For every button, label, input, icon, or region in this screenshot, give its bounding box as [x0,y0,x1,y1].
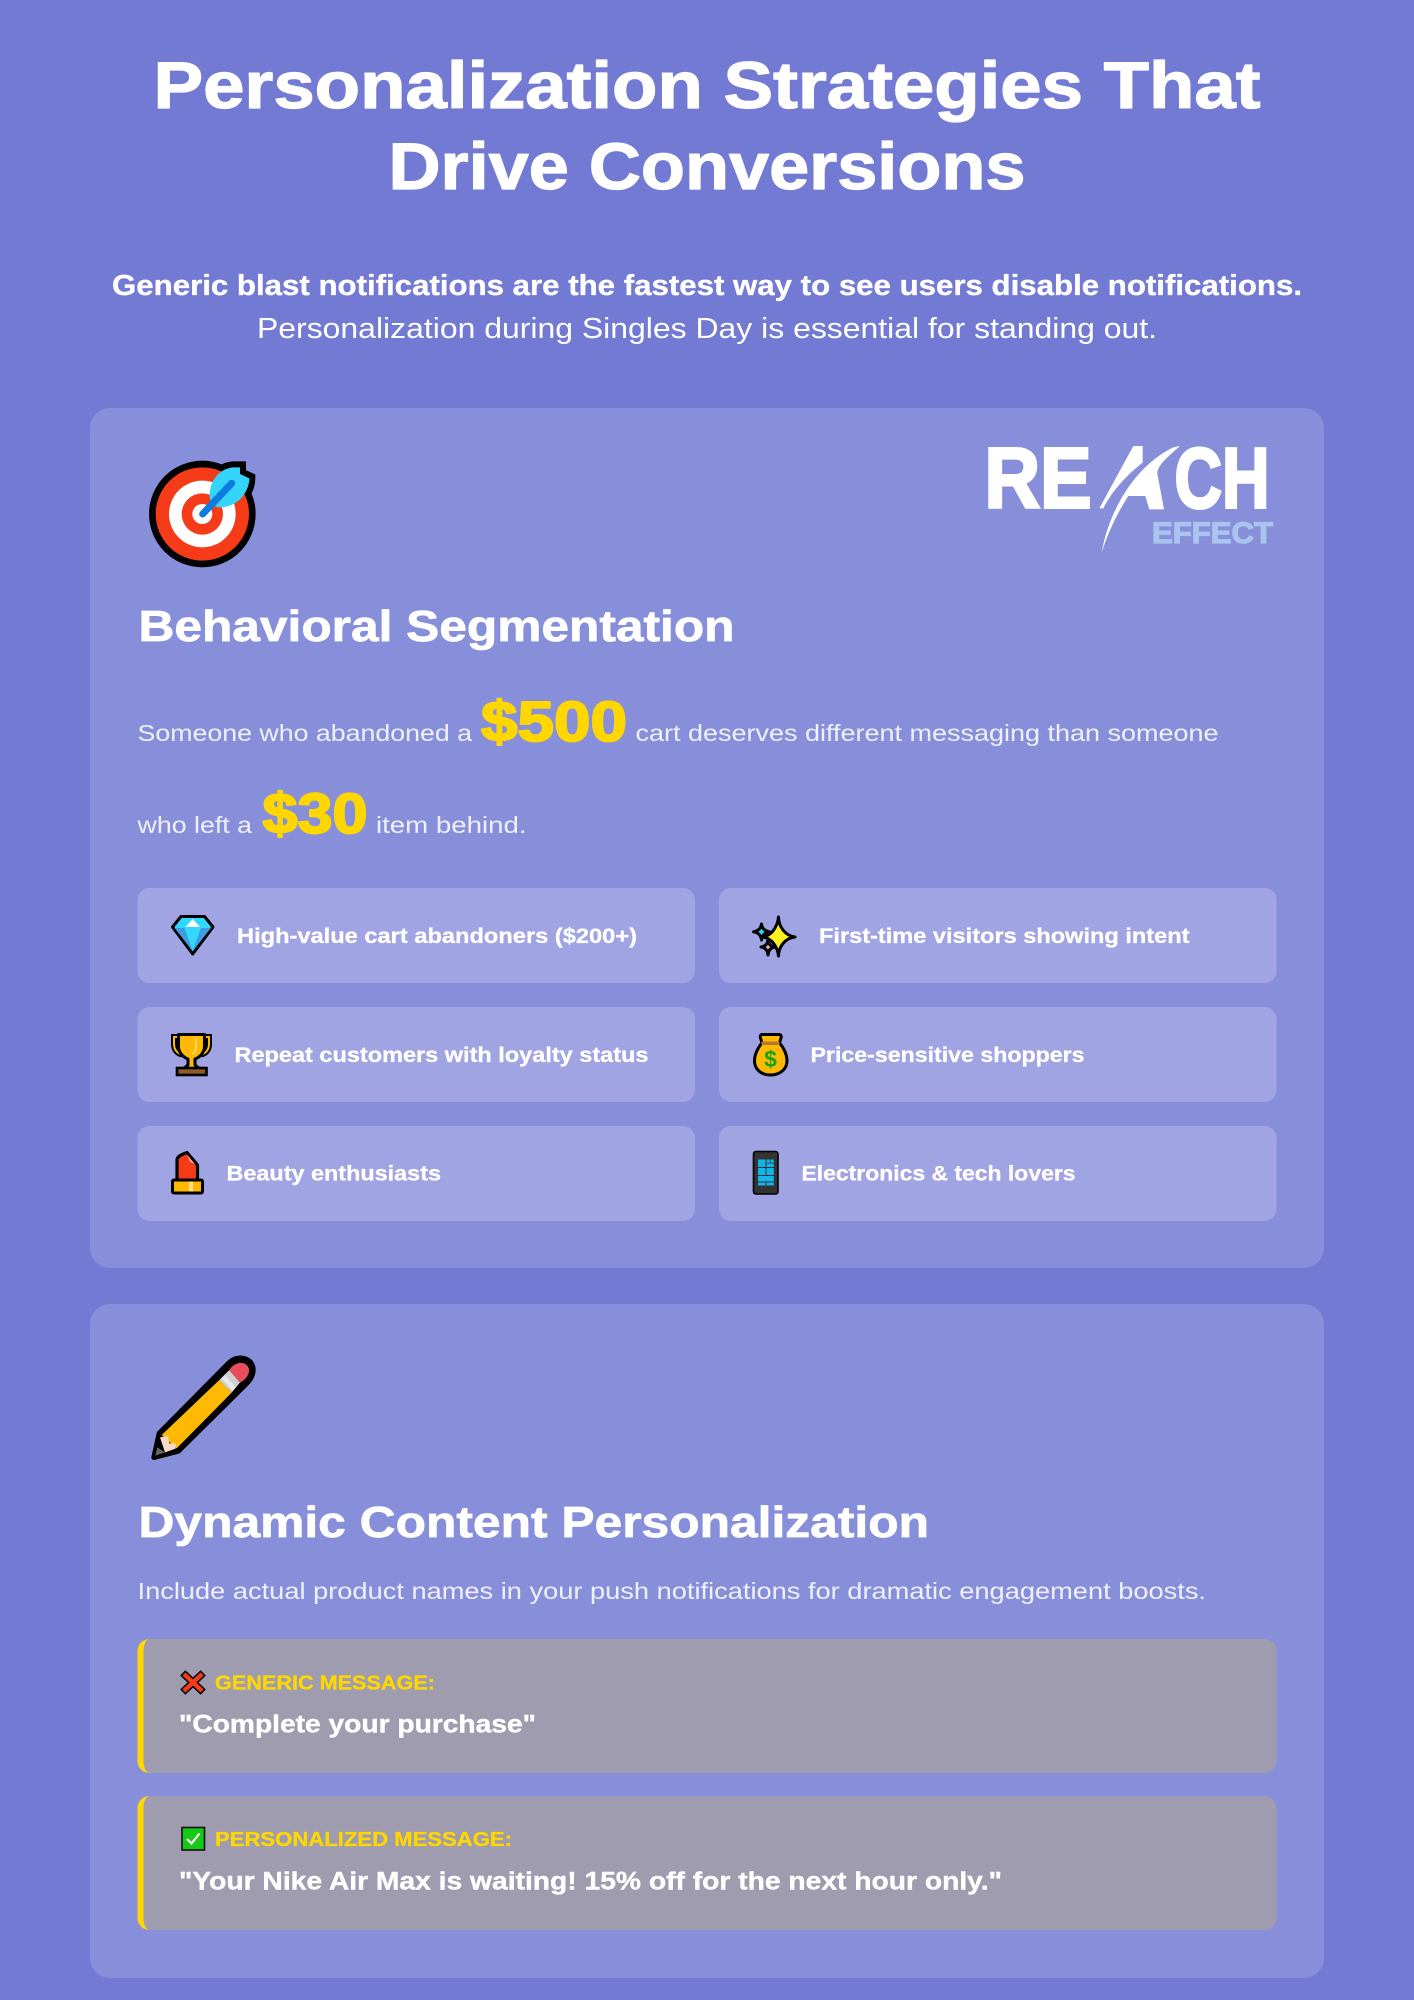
segment card: electronics and tech lovers [719,1126,1276,1221]
body text: cart value comparison: who left a [136,812,253,838]
title: Personalization Strategies That [154,48,1261,122]
subtitle [112,270,1302,345]
icon: trophy [174,1034,209,1075]
icon: cross mark [186,1676,200,1690]
icon: money bag [754,1034,787,1075]
logo: Reach Effect: CH [1174,432,1270,526]
logo: Reach Effect: EFFECT [1152,517,1273,550]
logo: Reach Effect [984,432,1273,553]
body text: cart value comparison [136,690,1218,846]
message box: generic: "Complete your purchase" [179,1710,536,1738]
icon: diamond [172,916,213,954]
segment card: beauty enthusiasts [138,1126,695,1221]
title: Drive Conversions [388,129,1026,203]
icon: smartphone [754,1152,778,1194]
body text: product names: Include actual product names in your push notifications for dramatic engagement boosts. [138,1578,1206,1604]
icon: lipstick [172,1152,202,1193]
segment card: high-value cart abandoners [138,888,695,983]
segment card: high-value cart abandoners: High-value cart abandoners ($200+) [237,925,637,948]
title [154,48,1261,203]
message box: generic [138,1639,1276,1773]
panel: behavioral segmentation [90,408,1324,1268]
logo: Reach Effect: RE [984,432,1092,526]
panel: dynamic content personalization [90,1304,1324,1978]
icon: money bag: $ [764,1046,777,1072]
icon: target with dart [149,461,256,567]
segment card: price-sensitive shoppers: Price-sensitive shoppers [810,1044,1084,1067]
segment card: first-time visitors [719,888,1276,983]
icon: pencil [154,1358,253,1457]
heading: behavioral segmentation: Behavioral Segmentation [138,603,734,651]
segment card: repeat customers: Repeat customers with loyalty status [234,1044,648,1067]
body text: cart value comparison: $500 [481,690,627,754]
subtitle: Generic blast notifications are the fastest way to see users disable notifications. [112,270,1302,302]
message box: generic: GENERIC MESSAGE: [215,1672,435,1694]
segment card: first-time visitors: First-time visitors showing intent [819,925,1190,948]
body text: cart value comparison: Someone who abandoned a [138,720,473,746]
segment card: repeat customers [138,1007,695,1102]
segment card: price-sensitive shoppers [719,1007,1276,1102]
body text: cart value comparison: $30 [262,782,368,846]
icon: check mark [182,1828,204,1850]
body text: cart value comparison: item behind. [376,812,526,838]
message box: personalized: PERSONALIZED MESSAGE: [215,1829,512,1851]
segment card: beauty enthusiasts: Beauty enthusiasts [226,1162,441,1186]
body text: cart value comparison: cart deserves different messaging than someone [636,720,1218,746]
heading: dynamic content personalization: Dynamic Content Personalization [138,1499,929,1547]
message box: personalized [138,1796,1276,1930]
segment card: electronics and tech lovers: Electronics & tech lovers [802,1162,1076,1186]
subtitle: Personalization during Singles Day is essential for standing out. [257,313,1157,345]
message box: personalized: "Your Nike Air Max is waiting! 15% off for the next hour only." [179,1868,1002,1896]
icon: sparkles [754,917,795,956]
